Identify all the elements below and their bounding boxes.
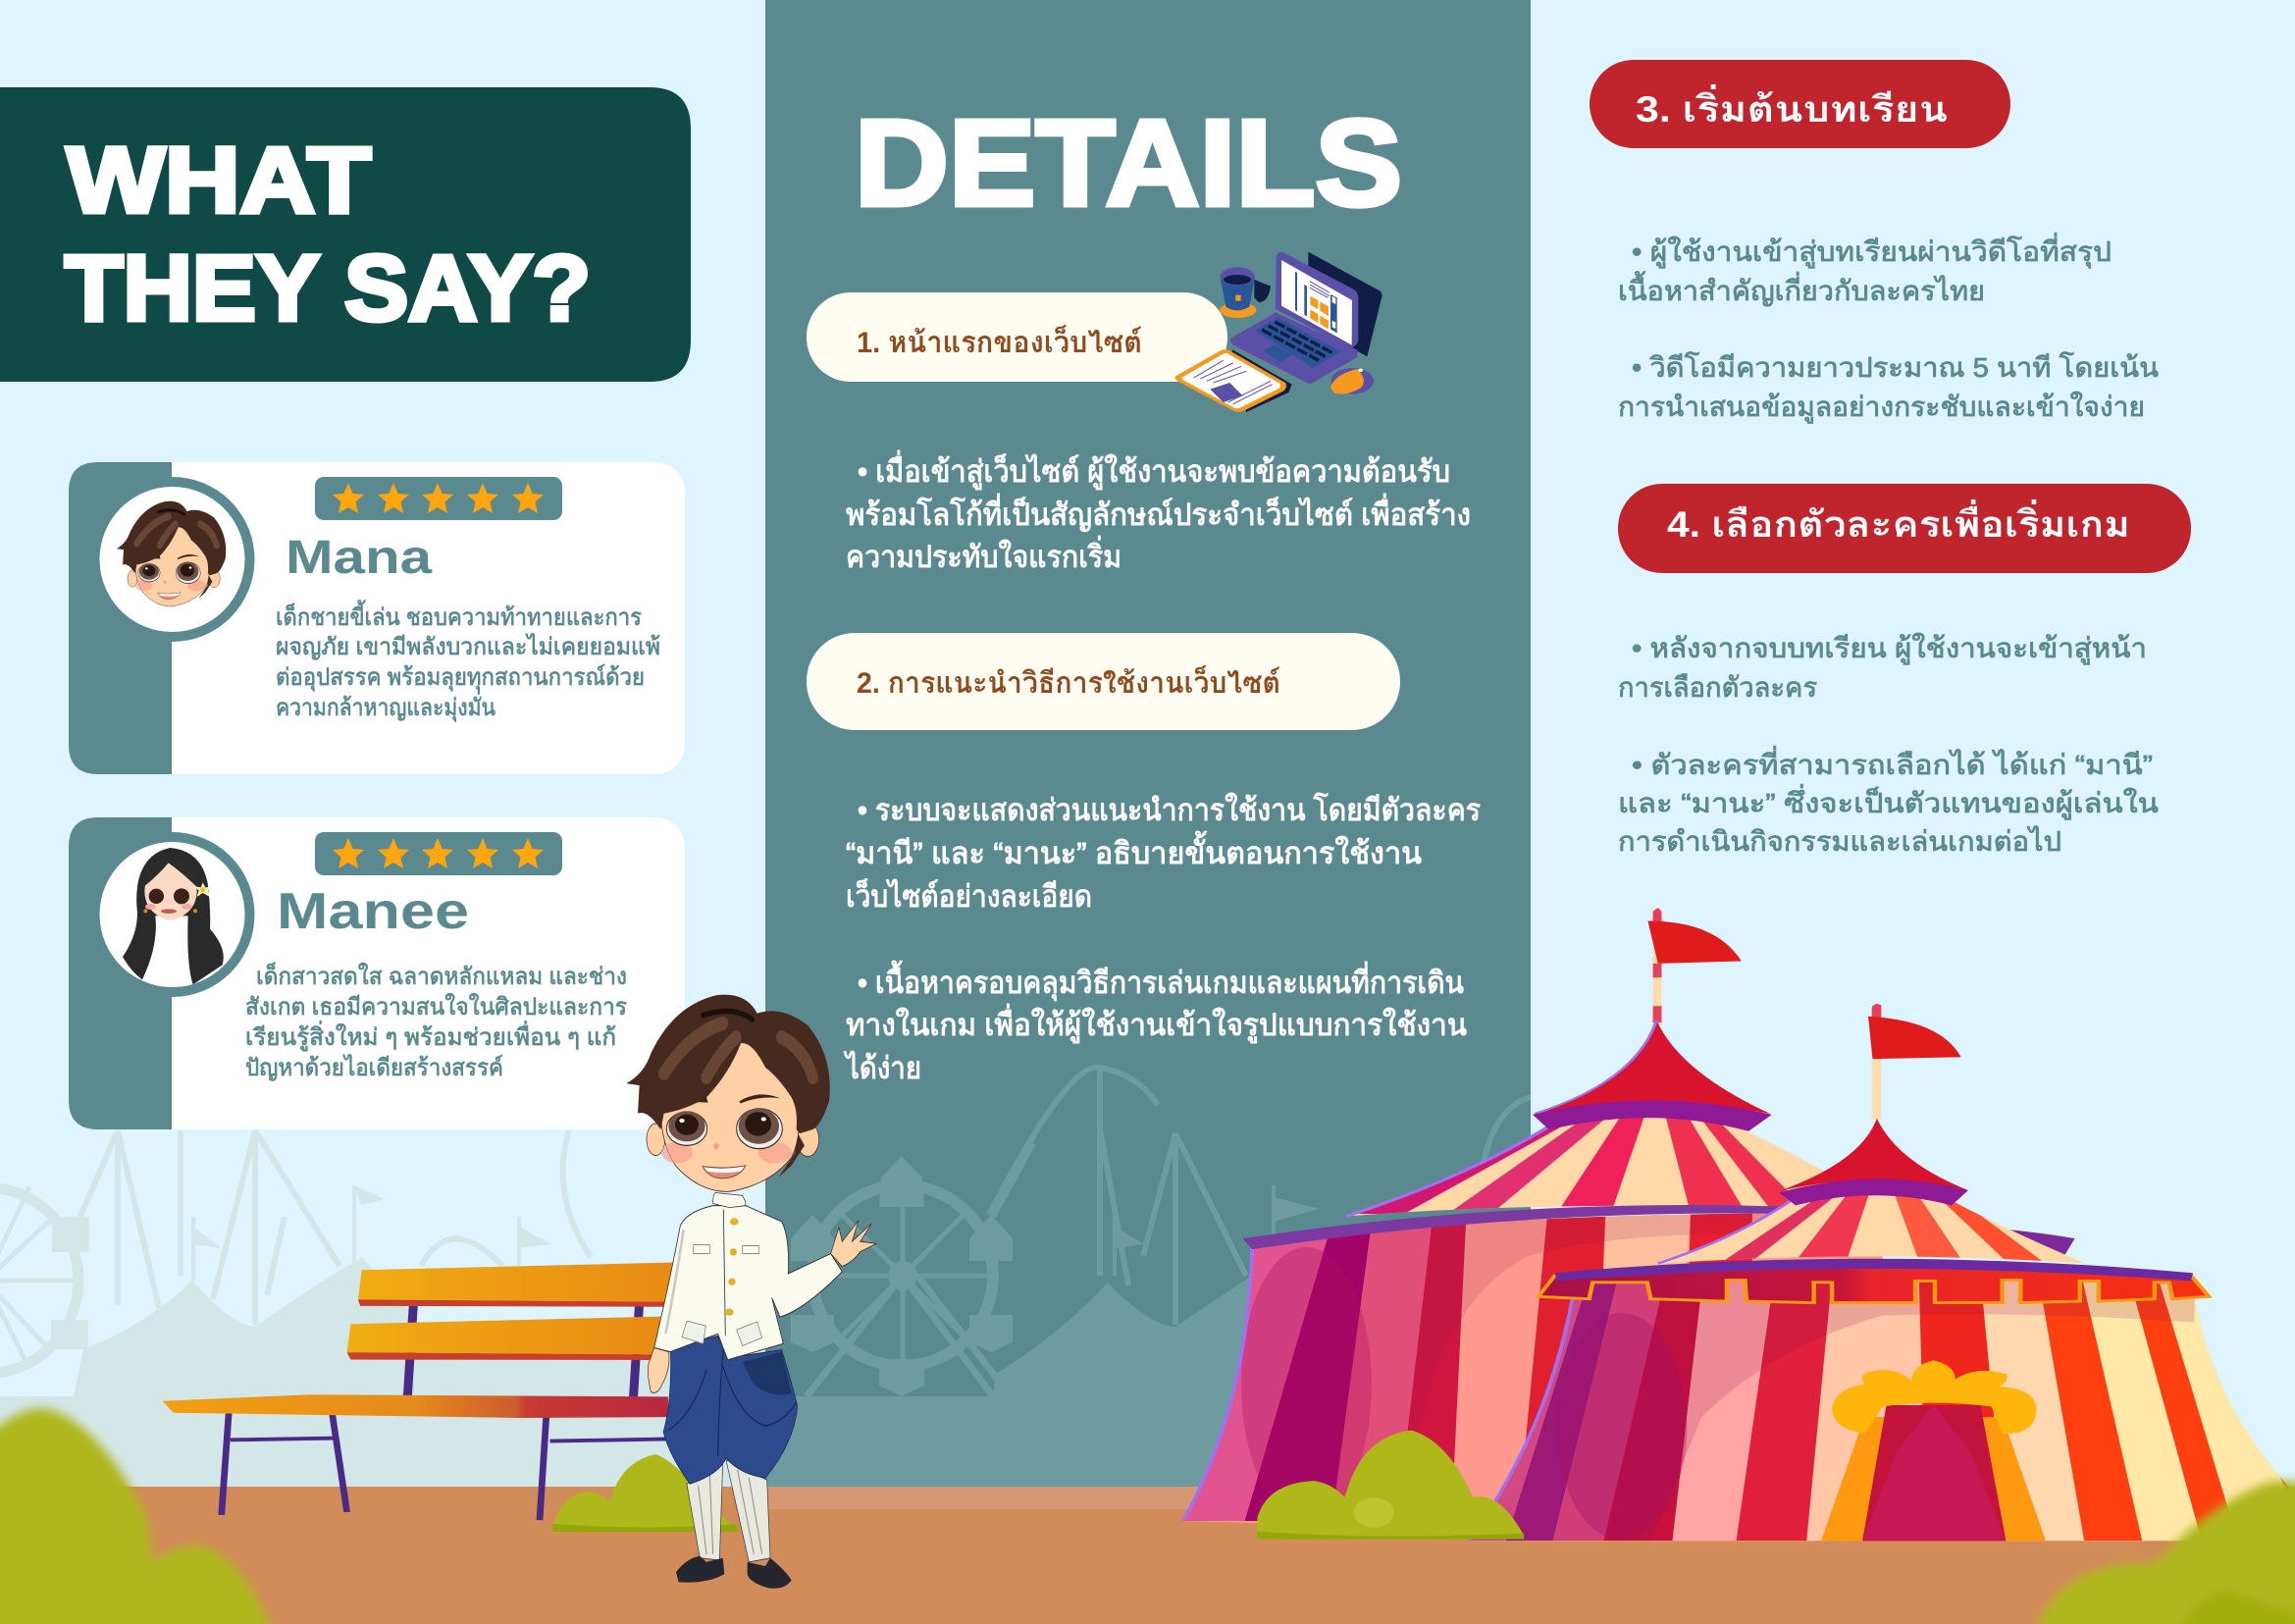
socks: [687, 1460, 770, 1562]
section 4 text: การเลือกตัวละคร: [1618, 672, 1817, 703]
boy head: [626, 995, 830, 1191]
section 2 text: ได้ง่าย: [843, 1051, 921, 1085]
illustration: circus tents: [1179, 908, 2295, 1541]
description: Mana: ต่ออุปสรรค พร้อมลุยทุกสถานการณ์ด้วย: [276, 663, 645, 692]
ground: [0, 1487, 2295, 1624]
section 4 text: และ “มานะ” ซึ่งจะเป็นตัวแทนของผู้เล่นใน: [1618, 784, 2159, 820]
name: Mana: Mana: [286, 532, 432, 584]
section 3 text: [1618, 233, 2159, 424]
panel: center details background: [765, 0, 1531, 1487]
section 1 pill: homepage: [807, 292, 1227, 382]
section 1 text: พร้อมโลโก้ที่เป็นสัญลักษณ์ประจำเว็บไซต์ เพื่อสร้าง: [846, 494, 1471, 532]
panel: Manee review card: [69, 817, 685, 1129]
description: Manee: เด็กสาวสดใส ฉลาดหลักแหลม และช่าง: [256, 962, 627, 990]
section 4 text: การดำเนินกิจกรรมและเล่นเกมต่อไป: [1618, 826, 2061, 857]
illustration: park bench: [163, 1263, 675, 1520]
section 2 text: ทางในเกม เพื่อให้ผู้ใช้งานเข้าใจรูปแบบการใช้งาน: [846, 1004, 1467, 1043]
description: Manee: ปัญหาด้วยไอเดียสร้างสรรค์: [245, 1054, 503, 1081]
section 3 text: เนื้อหาสำคัญเกี่ยวกับละครไทย: [1618, 271, 1985, 306]
section 3 pill: start lesson: [1590, 60, 2010, 148]
section 4 text: • ตัวละครที่สามารถเลือกได้ ได้แก่ “มานี”: [1632, 746, 2153, 780]
description: Mana: ผจญภัย เขามีพลังบวกและไม่เคยยอมแพ้: [276, 633, 660, 660]
section 1 text: [846, 450, 1471, 574]
name: Manee: Manee: [277, 883, 469, 940]
section 2 text: “มานี” และ “มานะ” อธิบายขั้นตอนการใช้งาน: [846, 831, 1422, 870]
avatar: Manee: [90, 832, 255, 997]
heading: what they say: THEY SAY?: [65, 236, 591, 341]
background: amusement park silhouette: [0, 1068, 1535, 1487]
description: Manee: [245, 962, 627, 1081]
tent: front: [1462, 1004, 2295, 1541]
section 4 pill: choose character: 4. เลือกตัวละครเพื่อเริ่มเกม: [1667, 498, 2130, 545]
left hand: [648, 1348, 669, 1392]
blue pants: [663, 1336, 798, 1484]
section 2 text: • เนื้อหาครอบคลุมวิธีการเล่นเกมและแผนที่การเดิน: [858, 961, 1464, 1002]
section 1 text: • เมื่อเข้าสู่เว็บไซต์ ผู้ใช้งานจะพบข้อความต้อนรับ: [858, 450, 1450, 490]
description: Manee: สังเกต เธอมีความสนใจในศิลปะและการ: [245, 993, 627, 1021]
section 4 text: • หลังจากจบบทเรียน ผู้ใช้งานจะเข้าสู่หน้า: [1632, 632, 2147, 665]
tent valance: [1539, 1261, 2209, 1303]
star rating: Mana: [315, 477, 562, 520]
heading: what they say: WHAT: [67, 129, 371, 233]
section 3 text: การนำเสนอข้อมูลอย่างกระชับและเข้าใจง่าย: [1618, 391, 2145, 424]
icon: laptop, tablet, cup and mouse: [1174, 252, 1382, 412]
section 2 pill: how to use: [807, 633, 1400, 730]
panel: Mana review card: [69, 462, 685, 774]
foreground: blurred bush bottom right: [2031, 1481, 2295, 1624]
section 4 pill: choose character: [1618, 484, 2191, 573]
heading: details: DETAILS: [855, 95, 1402, 232]
section 2 text: • ระบบจะแสดงส่วนแนะนำการใช้งาน โดยมีตัวละคร: [858, 793, 1481, 827]
white jacket: [654, 1206, 842, 1360]
tent door: [1821, 1360, 2046, 1541]
section 2 text: เว็บไซต์อย่างละเอียด: [846, 878, 1092, 914]
raised hand: [831, 1221, 876, 1267]
section 3 text: • ผู้ใช้งานเข้าสู่บทเรียนผ่านวิดีโอที่สรุป: [1632, 233, 2112, 269]
foreground: blurred bush bottom left: [0, 1408, 273, 1624]
section 3 text: • วิดีโอมีความยาวประมาณ 5 นาที โดยเน้น: [1632, 351, 2159, 383]
heading: what they say: [65, 129, 591, 341]
tent: back: [1179, 908, 2075, 1540]
description: Manee: เรียนรู้สิ่งใหม่ ๆ พร้อมช่วยเพื่อน ๆ แก้: [245, 1021, 616, 1052]
section 1 pill: homepage: 1. หน้าแรกของเว็บไซต์: [857, 325, 1142, 359]
bush: near tents: [1257, 1431, 1524, 1539]
illustration: boy character: [626, 995, 876, 1589]
description: Mana: ความกล้าหาญและมุ่งมั่น: [276, 691, 496, 722]
section 2 text: [843, 793, 1481, 1085]
description: Mana: เด็กชายขี้เล่น ชอบความท้าทายและการ: [276, 600, 642, 631]
description: Mana: [276, 600, 660, 722]
section 3 pill: start lesson: 3. เริ่มต้นบทเรียน: [1636, 83, 1948, 130]
shoes: [676, 1556, 792, 1589]
section 1 text: ความประทับใจแรกเริ่ม: [846, 536, 1121, 574]
section 4 text: [1618, 632, 2159, 857]
avatar: Mana: [90, 477, 255, 642]
header panel: what they say: [0, 87, 691, 382]
star rating: Manee: [315, 832, 562, 875]
section 2 pill: how to use: 2. การแนะนำวิธีการใช้งานเว็บไซต์: [857, 665, 1280, 700]
illustration: bush behind character: [552, 1454, 739, 1532]
